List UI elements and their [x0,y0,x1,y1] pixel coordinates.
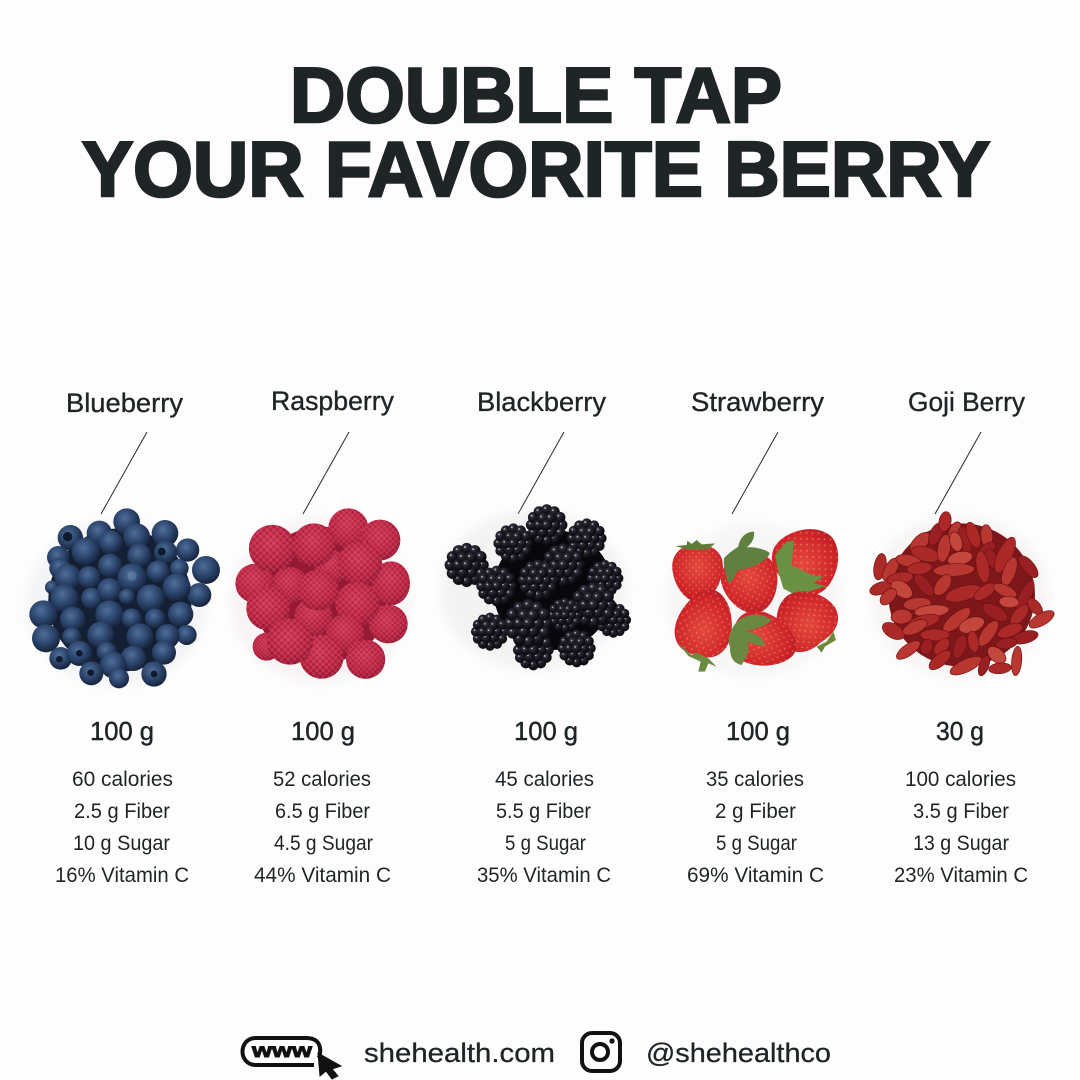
nutrition facts: Blackberry: 45 calories [495,768,594,791]
nutrition facts: Strawberry: 69% Vitamin C [687,864,824,887]
weight: 100 g: 100 g [291,716,355,746]
panel: blackberry [440,387,631,887]
footer [242,1033,831,1079]
leader line: Raspberry [303,432,349,514]
nutrition facts: Blueberry: 10 g Sugar [73,832,170,855]
icon: raspberries pile [230,508,410,683]
nutrition facts: Goji Berry [894,768,1028,887]
icon: instagram [582,1033,620,1071]
weight: 100 g: 100 g [726,716,790,746]
strawberry 3 [762,513,855,605]
nutrition facts: Strawberry [687,768,824,887]
label: Goji Berry: Goji Berry [908,387,1025,417]
icon: website pill with cursor: www [251,1041,312,1062]
strawberry 5 [762,577,847,661]
nutrition facts: Raspberry: 52 calories [273,768,371,791]
nutrition facts: Blackberry: 35% Vitamin C [477,864,611,887]
nutrition facts: Blueberry: 16% Vitamin C [55,864,189,887]
label: Raspberry: Raspberry [271,386,394,416]
panel: raspberry [230,386,410,887]
icon: website pill with cursor [242,1038,341,1079]
nutrition facts: Strawberry: 35 calories [706,768,804,791]
label: Blackberry: Blackberry [477,387,606,417]
weight: 30 g: 30 g [936,716,984,746]
website address: shehealth.com [364,1038,555,1068]
leader line: Strawberry [732,432,778,514]
icon: blueberries pile [27,508,220,688]
title: YOUR FAVORITE BERRY [82,125,990,213]
nutrition facts: Blackberry: 5 g Sugar [505,832,586,855]
icon: goji berries pile [868,511,1057,679]
label: Blueberry: Blueberry [66,388,183,418]
leader line: Blueberry [101,432,147,514]
weight: 100 g: 100 g [514,716,578,746]
nutrition facts: Blueberry [55,768,189,887]
strawberry 6 [725,605,804,676]
leader line: Blackberry [518,432,564,514]
nutrition facts: Raspberry [254,768,391,887]
title: DOUBLE TAP [290,51,782,139]
nutrition facts: Blueberry: 2.5 g Fiber [74,800,170,823]
nutrition facts: Raspberry: 44% Vitamin C [254,864,391,887]
strawberry 4 [669,582,742,672]
panel: blueberry [27,388,220,887]
title [82,51,990,213]
nutrition facts: Raspberry: 6.5 g Fiber [275,800,370,823]
icon: strawberries group [667,513,855,677]
nutrition facts: Goji Berry: 3.5 g Fiber [913,800,1009,823]
nutrition facts: Goji Berry: 13 g Sugar [913,832,1009,855]
nutrition facts: Blackberry: 5.5 g Fiber [496,800,591,823]
panel: goji berry [868,387,1057,887]
nutrition facts: Raspberry: 4.5 g Sugar [274,832,373,855]
strawberry 1 [672,540,723,602]
icon: blackberries pile [440,504,631,670]
label: Strawberry: Strawberry [691,387,825,417]
weight: 100 g: 100 g [90,716,154,746]
nutrition facts: Goji Berry: 100 calories [905,768,1016,791]
nutrition facts: Blackberry [477,768,611,887]
nutrition facts: Goji Berry: 23% Vitamin C [894,864,1028,887]
nutrition facts: Blueberry: 60 calories [72,768,173,791]
strawberry 2 [716,532,786,620]
instagram handle: @shehealthco [646,1038,831,1068]
nutrition facts: Strawberry: 5 g Sugar [716,832,797,855]
leader line: Goji Berry [935,432,981,514]
nutrition facts: Strawberry: 2 g Fiber [715,800,796,823]
panel: strawberry [667,387,855,887]
